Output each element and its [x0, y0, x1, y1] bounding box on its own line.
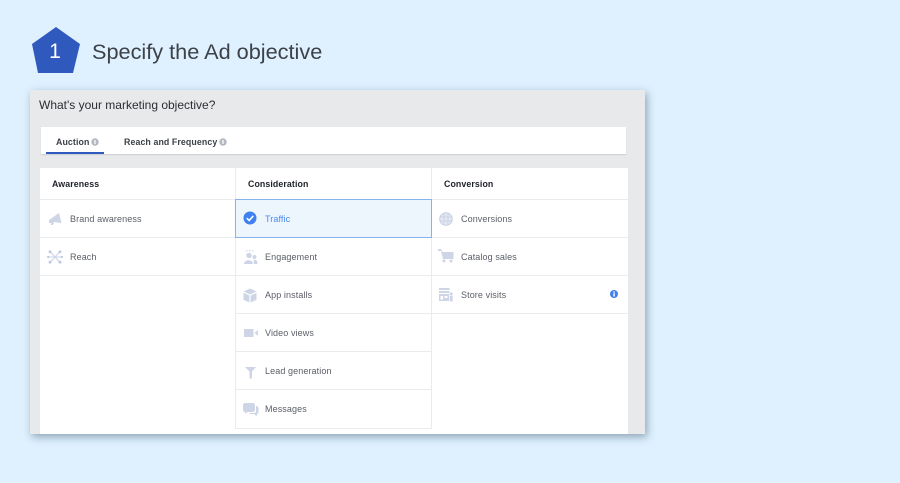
tab: Auction: Auction — [56, 137, 89, 147]
label: Store visits: Store visits — [461, 290, 506, 300]
icon: funnel — [245, 367, 256, 378]
icon: megaphone — [49, 213, 62, 225]
icon: check — [244, 212, 256, 224]
column heading: Conversion: Conversion — [444, 179, 493, 189]
icon: app installs — [244, 288, 256, 302]
question heading: What's your marketing objective? — [39, 98, 215, 112]
label: App installs: App installs — [265, 290, 312, 300]
label: Lead generation: Lead generation — [265, 366, 332, 376]
label: Brand awareness: Brand awareness — [70, 214, 142, 224]
label: Conversions: Conversions — [461, 214, 512, 224]
panel: marketing objective card — [30, 90, 645, 434]
icon: Auction info — [91, 138, 99, 146]
tab: Reach and Frequency: Reach and Frequency — [124, 137, 217, 147]
title: Specify the Ad objective — [92, 39, 322, 64]
label: Messages: Messages — [265, 404, 307, 414]
icon: video camera — [244, 329, 258, 337]
active tab underline — [46, 152, 104, 154]
column heading: Consideration: Consideration — [248, 179, 308, 189]
icon: step number pentagon — [32, 27, 80, 73]
label: Engagement: Engagement — [265, 252, 317, 262]
label: Video views: Video views — [265, 328, 314, 338]
icon: reach — [47, 250, 63, 264]
selected row: Traffic — [235, 199, 432, 238]
icon: shopping cart — [438, 249, 454, 262]
icon: globe — [439, 212, 453, 226]
label: Traffic: Traffic — [265, 214, 290, 224]
label: Reach: Reach — [70, 252, 97, 262]
icon: chat bubbles — [243, 403, 258, 416]
column heading: Awareness: Awareness — [52, 179, 99, 189]
tab bar — [41, 127, 626, 154]
icon: engagement — [244, 250, 258, 264]
label: Catalog sales: Catalog sales — [461, 252, 517, 262]
objectives table — [40, 168, 628, 434]
icon: Reach and Frequency info — [219, 138, 227, 146]
icon: info — [610, 290, 618, 298]
icon: store — [439, 288, 453, 302]
icon: step number pentagon: 1 — [49, 40, 61, 63]
